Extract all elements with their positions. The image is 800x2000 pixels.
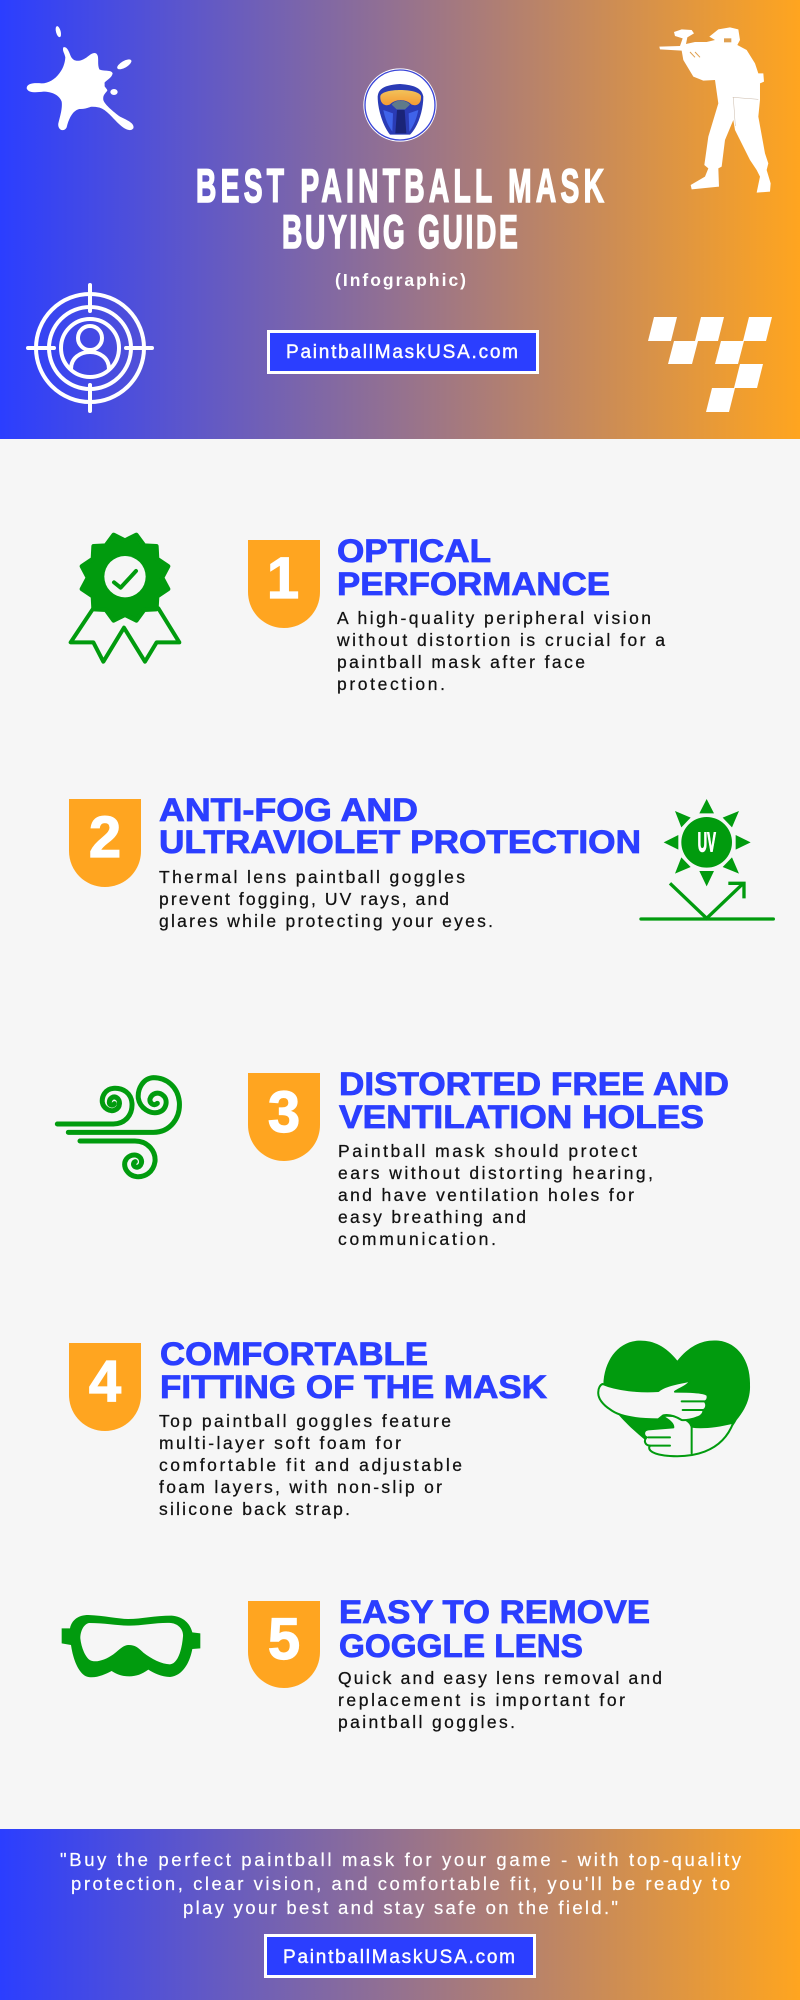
icon: goggles — [62, 1615, 200, 1677]
heading: EASY TO REMOVE — [339, 1594, 650, 1630]
icon: heart hugged by arms — [598, 1340, 750, 1457]
heading — [337, 533, 610, 602]
heading: VENTILATION HOLES — [339, 1099, 704, 1135]
heading: OPTICAL — [337, 533, 491, 569]
body text: prevent fogging, UV rays, and — [159, 889, 449, 909]
body text: Top paintball goggles feature — [159, 1411, 451, 1431]
title: BEST PAINTBALL MASK — [196, 161, 604, 213]
body text: silicone back strap. — [159, 1499, 350, 1519]
icon: target with person — [28, 285, 152, 411]
body text: paintball goggles. — [338, 1712, 515, 1732]
heading — [339, 1066, 729, 1135]
section 5: easy to remove lens — [62, 1594, 662, 1732]
heading — [339, 1594, 650, 1664]
body text: easy breathing and — [338, 1207, 526, 1227]
body text: Thermal lens paintball goggles — [159, 867, 465, 887]
section 1: optical performance — [71, 533, 665, 694]
body text — [159, 1411, 462, 1519]
body text — [338, 1668, 662, 1732]
badge: number 1: 1 — [267, 546, 299, 611]
heading: PERFORMANCE — [337, 566, 610, 602]
button: website link: PaintballMaskUSA.com — [286, 342, 518, 363]
badge: number 3: 3 — [268, 1080, 300, 1145]
badge: number 2: 2 — [89, 805, 121, 870]
body text: replacement is important for — [338, 1690, 625, 1710]
body text: Paintball mask should protect — [338, 1141, 637, 1161]
body text: multi-layer soft foam for — [159, 1433, 401, 1453]
icon: award ribbon — [71, 535, 179, 662]
heading: ANTI-FOG AND — [159, 792, 418, 828]
button: website link — [268, 332, 538, 372]
heading: ULTRAVIOLET PROTECTION — [159, 824, 641, 860]
badge: number 5: 5 — [268, 1607, 300, 1672]
heading — [159, 792, 641, 860]
icon: wind swirls — [57, 1078, 179, 1177]
body text: glares while protecting your eyes. — [159, 911, 493, 931]
closing quote: "Buy the perfect paintball mask for your game - with top-quality — [60, 1849, 742, 1870]
icon: paintball player silhouette — [659, 27, 771, 193]
button: website link — [266, 1936, 534, 1976]
body text: comfortable fit and adjustable — [159, 1455, 462, 1475]
section 2: anti-fog and UV protection — [69, 792, 773, 931]
body text: A high-quality peripheral vision — [337, 608, 651, 628]
body text: protection. — [337, 674, 445, 694]
closing quote — [60, 1849, 742, 1918]
panel: header — [0, 0, 800, 439]
body text — [338, 1141, 653, 1249]
title — [196, 161, 604, 259]
heading: DISTORTED FREE AND — [339, 1066, 729, 1102]
badge: number 4: 4 — [89, 1349, 121, 1414]
icon: paint splat — [27, 26, 134, 130]
logo: paintball mask badge — [363, 68, 437, 142]
title: BUYING GUIDE — [282, 207, 518, 259]
badge: number 4 — [69, 1343, 141, 1431]
panel: footer — [0, 1829, 800, 2000]
body text: and have ventilation holes for — [338, 1185, 634, 1205]
badge: number 3 — [248, 1073, 320, 1161]
closing quote: protection, clear vision, and comfortable fit, you'll be ready to — [71, 1873, 730, 1894]
body text — [159, 867, 493, 931]
badge: number 1 — [248, 540, 320, 628]
section 3: distortion free and ventilation — [57, 1066, 729, 1249]
icon: UV sun reflecting: UV — [698, 827, 716, 858]
icon: UV sun reflecting — [641, 799, 773, 919]
heading — [160, 1336, 547, 1405]
heading: COMFORTABLE — [160, 1336, 428, 1372]
subtitle: (Infographic) — [335, 270, 466, 290]
button: website link: PaintballMaskUSA.com — [283, 1947, 515, 1968]
body text — [336, 608, 665, 694]
body text: without distortion is crucial for a — [336, 630, 665, 650]
icon: checkered flag — [648, 317, 772, 412]
body text: Quick and easy lens removal and — [338, 1668, 662, 1688]
body text: foam layers, with non-slip or — [159, 1477, 442, 1497]
body text: ears without distorting hearing, — [338, 1163, 653, 1183]
heading: FITTING OF THE MASK — [160, 1369, 547, 1405]
closing quote: play your best and stay safe on the field." — [183, 1897, 618, 1918]
heading: GOGGLE LENS — [339, 1628, 583, 1664]
body text: paintball mask after face — [337, 652, 585, 672]
section 4: comfortable fitting — [69, 1336, 750, 1519]
body text: communication. — [338, 1229, 496, 1249]
badge: number 5 — [248, 1601, 320, 1688]
badge: number 2 — [69, 799, 141, 887]
